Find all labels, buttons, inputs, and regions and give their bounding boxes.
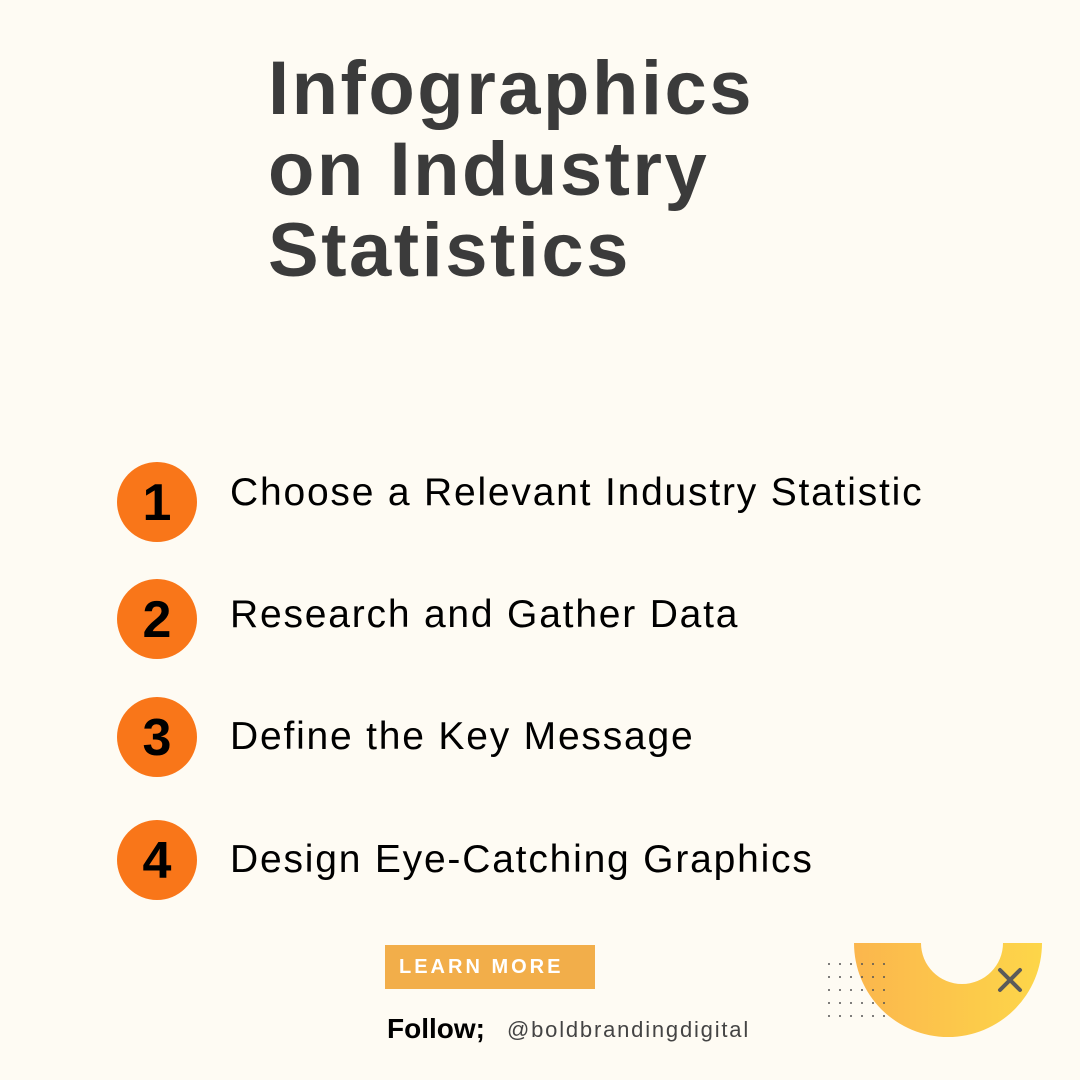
badge 2: 2 <box>143 591 171 649</box>
badge 1: 1 <box>143 474 171 532</box>
step 3 <box>117 697 695 777</box>
learn more button <box>385 945 595 989</box>
learn more button: LEARN MORE <box>399 956 563 978</box>
badge 2 <box>117 579 197 659</box>
step 2 text: Research and Gather Data <box>230 593 739 636</box>
badge 3: 3 <box>143 709 171 767</box>
step 1 <box>117 462 923 542</box>
title: on Industry <box>268 127 709 212</box>
badge 1 <box>117 462 197 542</box>
title <box>268 46 754 293</box>
handle: @boldbrandingdigital <box>507 1017 750 1042</box>
badge 3 <box>117 697 197 777</box>
step 1 text: Choose a Relevant Industry Statistic <box>230 471 923 514</box>
title: Statistics <box>268 208 631 293</box>
step 4 <box>117 820 814 900</box>
step 4 text: Design Eye-Catching Graphics <box>230 838 814 881</box>
badge 4 <box>117 820 197 900</box>
step 3 text: Define the Key Message <box>230 715 695 758</box>
badge 4: 4 <box>143 832 171 890</box>
follow text: Follow; <box>387 1013 485 1044</box>
step 2 <box>117 579 739 659</box>
title: Infographics <box>268 46 754 131</box>
